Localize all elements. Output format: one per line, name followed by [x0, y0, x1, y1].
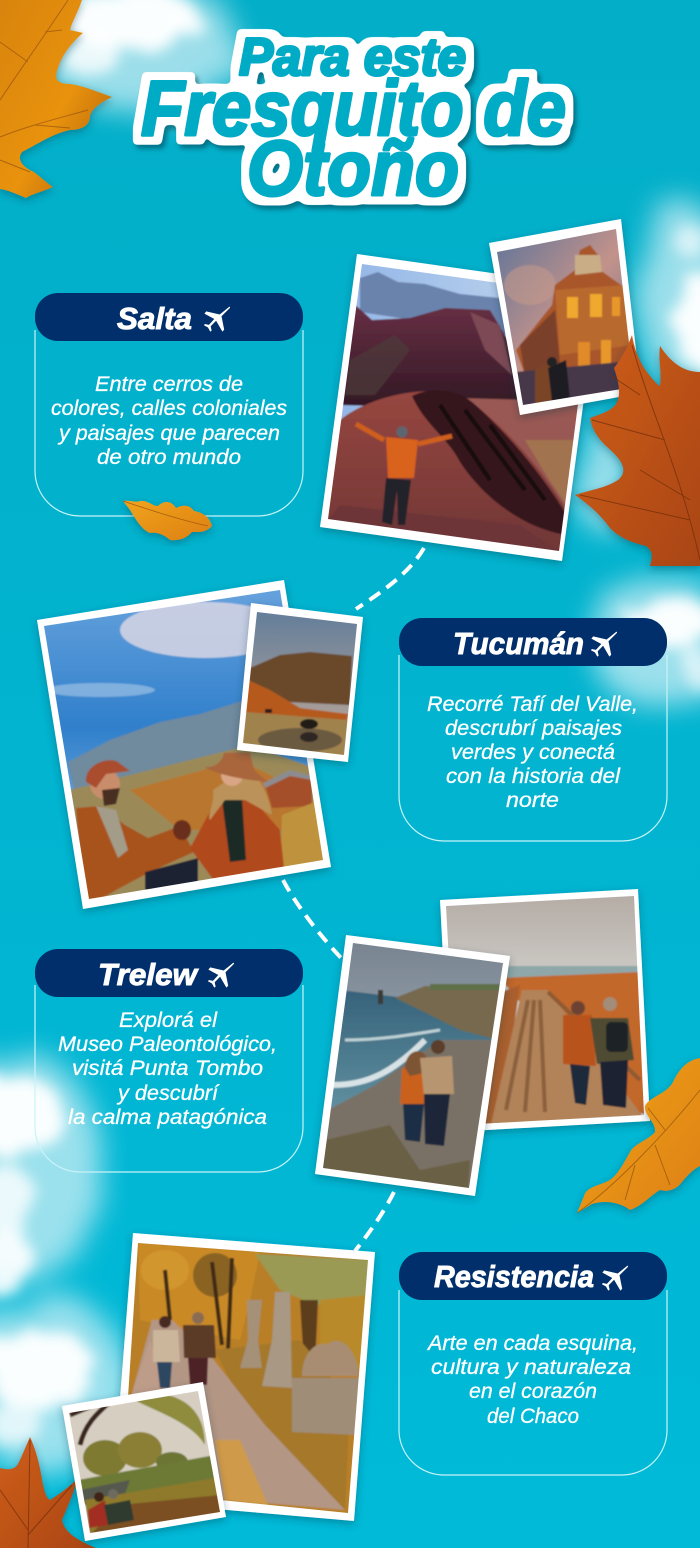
leaf: bottom left [0, 1437, 96, 1548]
panel header: Salta [35, 293, 303, 341]
body text: Salta: Entre cerros de [95, 373, 243, 396]
panel header: Resistencia [399, 1252, 667, 1300]
panel: Trelew [35, 949, 303, 1172]
body text: Resistencia [426, 1332, 638, 1428]
leaf: right of Trelew [577, 1058, 700, 1213]
body text: Tucumán: Recorré Tafí del Valle, [427, 693, 638, 716]
photo: Resistencia park [60, 1382, 230, 1541]
photo: Trelew boardwalk [440, 889, 650, 1132]
dashed route: Tucumán to Trelew [283, 880, 344, 961]
heading: Resistencia: Resistencia [434, 1259, 594, 1294]
body text: Resistencia: en el corazón [469, 1380, 597, 1403]
panel header: Trelew [35, 949, 303, 997]
body text: Trelew: la calma patagónica [68, 1106, 267, 1129]
leaf: top left [0, 0, 112, 198]
body text: Trelew: y descubrí [116, 1082, 220, 1105]
title: Fresquito de [141, 64, 566, 152]
photo: Tucumán couple [30, 575, 340, 915]
body text: Resistencia: Arte en cada esquina, [426, 1332, 638, 1355]
body text: Resistencia: del Chaco [487, 1405, 579, 1428]
title [141, 28, 566, 212]
body text: Salta: colores, calles coloniales [51, 397, 287, 420]
body text: Salta: de otro mundo [97, 446, 241, 469]
panel: Salta [35, 293, 303, 516]
body text: Salta [51, 373, 287, 469]
icon: plane [204, 307, 230, 332]
body text: Trelew: visitá Punta Tombo [72, 1057, 263, 1080]
body text: Tucumán: norte [506, 789, 559, 812]
panel header: Tucumán [399, 618, 667, 666]
body text: Trelew: Museo Paleontológico, [58, 1033, 277, 1056]
body text: Trelew [58, 1009, 277, 1129]
panel: Resistencia [399, 1252, 667, 1475]
photo: Tucumán valley [235, 600, 365, 765]
body text: Tucumán: con la historia del [446, 765, 621, 788]
leaf: right of Salta [575, 335, 700, 566]
photo: Resistencia sculpture path [112, 1233, 375, 1521]
body text: Tucumán: descrubrí paisajes [445, 717, 623, 740]
body text: Salta: y paisajes que parecen [57, 422, 280, 445]
panel: Tucumán [399, 618, 667, 841]
dashed route: Salta to Tucumán [356, 548, 424, 609]
icon: plane [591, 632, 617, 657]
photo: Trelew coast [315, 935, 510, 1196]
body text: Trelew: Explorá el [119, 1009, 218, 1032]
title: Otoño [247, 124, 459, 212]
heading: Salta: Salta [117, 301, 192, 336]
body text: Resistencia: cultura y naturaleza [431, 1356, 631, 1379]
icon: plane [208, 963, 234, 988]
leaf: on Salta panel [123, 501, 212, 540]
icon: plane [602, 1266, 628, 1291]
body text: Tucumán [427, 693, 638, 812]
title: Para este [239, 28, 466, 87]
heading: Tucumán: Tucumán [453, 626, 584, 661]
body text: Tucumán: verdes y conectá [451, 741, 615, 764]
photo: Salta mountains [320, 250, 610, 561]
heading: Trelew: Trelew [98, 957, 199, 992]
dashed route: Trelew to Resistencia [355, 1192, 394, 1251]
photo: Salta cathedral [485, 215, 645, 415]
